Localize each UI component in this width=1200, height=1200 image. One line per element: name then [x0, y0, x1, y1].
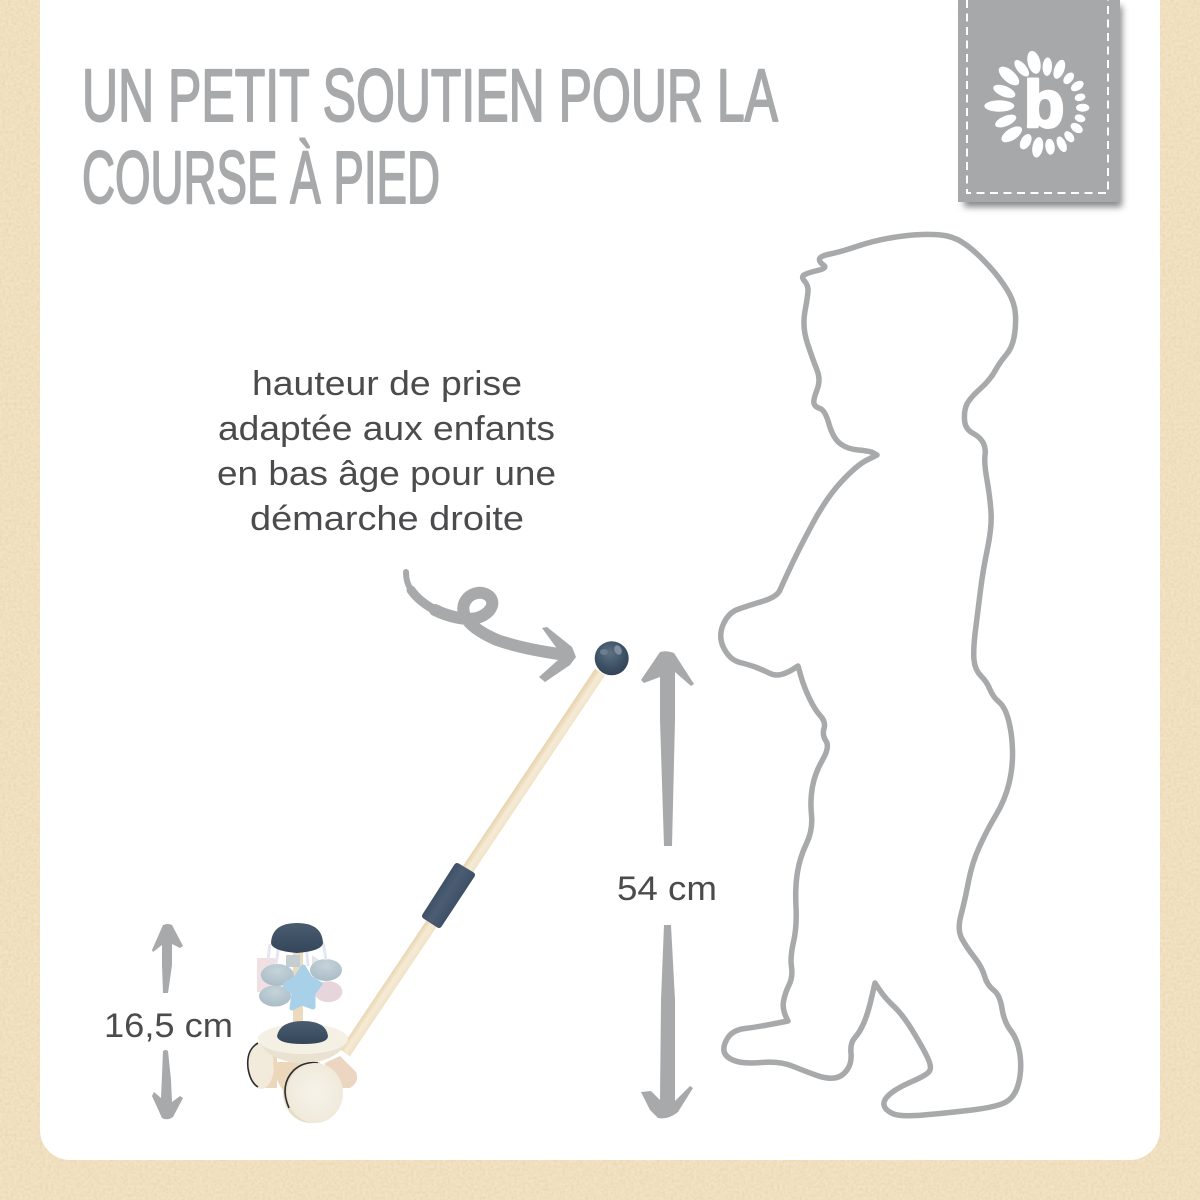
arrow: 54 cm down: [641, 925, 693, 1118]
arrow: 16,5 cm up: [152, 924, 183, 993]
toy handle ball: [595, 641, 629, 675]
callout text: démarche droite: [250, 500, 524, 538]
toy front wheel: [283, 1063, 343, 1123]
toy lower dome: [277, 1021, 328, 1044]
child silhouette outline: [721, 234, 1021, 1116]
toy star: [285, 967, 320, 1008]
callout text: hauteur de prise: [252, 365, 522, 403]
label: 54 cm: 54 cm: [617, 870, 717, 908]
arrow: 16,5 cm down: [152, 1050, 183, 1119]
icon: sunflower logo: b: [1024, 67, 1064, 141]
toy pebbles: [259, 955, 342, 1006]
label: 16,5 cm: 16,5 cm: [104, 1007, 233, 1045]
toy grip sleeve: [425, 866, 472, 925]
title: UN PETIT SOUTIEN POUR LA: [82, 54, 778, 137]
toy platform: [258, 1024, 348, 1064]
toy top dome: [271, 923, 323, 953]
callout text: adaptée aux enfants: [218, 410, 555, 448]
toy pole: [293, 945, 303, 1025]
toy stick: [345, 672, 600, 1053]
arrow: curly pointer to handle: [406, 572, 576, 682]
arrow: 54 cm up: [641, 651, 694, 846]
callout text: en bas âge pour une: [217, 455, 556, 493]
toy right bracket: [325, 1056, 357, 1088]
title: COURSE À PIED: [82, 136, 440, 219]
icon: sunflower logo: [984, 49, 1089, 158]
toy pink square: [257, 958, 275, 992]
toy strings: [268, 942, 326, 966]
toy rear bracket: [257, 1050, 277, 1088]
push toy: [248, 641, 629, 1123]
toy axle: [273, 1062, 320, 1098]
brand tag: [958, 0, 1122, 207]
callout text: [217, 365, 556, 538]
title: [82, 54, 778, 219]
toy left wheel: [248, 1043, 274, 1089]
